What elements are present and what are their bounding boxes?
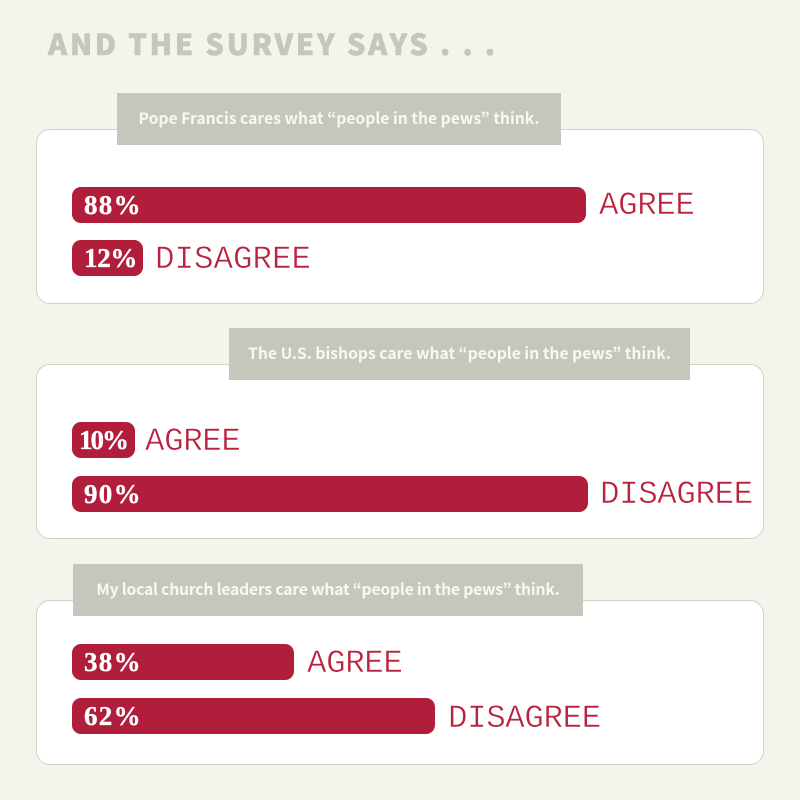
bar: 10% agree: 10% (79, 425, 127, 455)
bar: 38% agree: 38% (84, 647, 142, 677)
label: disagree: DISAGREE (448, 700, 601, 737)
label: agree: AGREE (145, 423, 241, 460)
bar: 88% agree (72, 187, 586, 223)
panel: local church leaders (36, 564, 764, 765)
panel card (36, 364, 764, 539)
label: disagree: DISAGREE (155, 241, 311, 278)
bar: 62% disagree: 62% (84, 700, 142, 730)
bar: 62% disagree (72, 698, 435, 734)
question heading (73, 564, 583, 616)
bar: 38% agree (72, 644, 294, 680)
question heading: My local church leaders care what “people in the pews” think. (96, 577, 560, 600)
title: AND THE SURVEY SAYS . . . (48, 22, 498, 64)
bar: 90% disagree: 90% (84, 478, 142, 508)
bar: 88% agree: 88% (84, 190, 142, 220)
panel card (36, 129, 764, 304)
label: disagree: DISAGREE (600, 476, 753, 513)
bar: 12% disagree (72, 240, 143, 276)
label: agree: AGREE (599, 187, 695, 224)
bar: 12% disagree: 12% (84, 243, 137, 273)
panel card (36, 600, 764, 765)
bar: 10% agree (72, 422, 135, 458)
bar: 90% disagree (72, 476, 588, 512)
panel: Pope Francis (36, 93, 764, 304)
question heading: The U.S. bishops care what “people in the pews” think. (248, 341, 671, 364)
question heading: Pope Francis cares what “people in the pews” think. (139, 106, 539, 129)
question heading (229, 328, 690, 380)
panel: U.S. bishops (36, 328, 764, 539)
label: agree: AGREE (307, 645, 403, 682)
question heading (117, 93, 561, 145)
